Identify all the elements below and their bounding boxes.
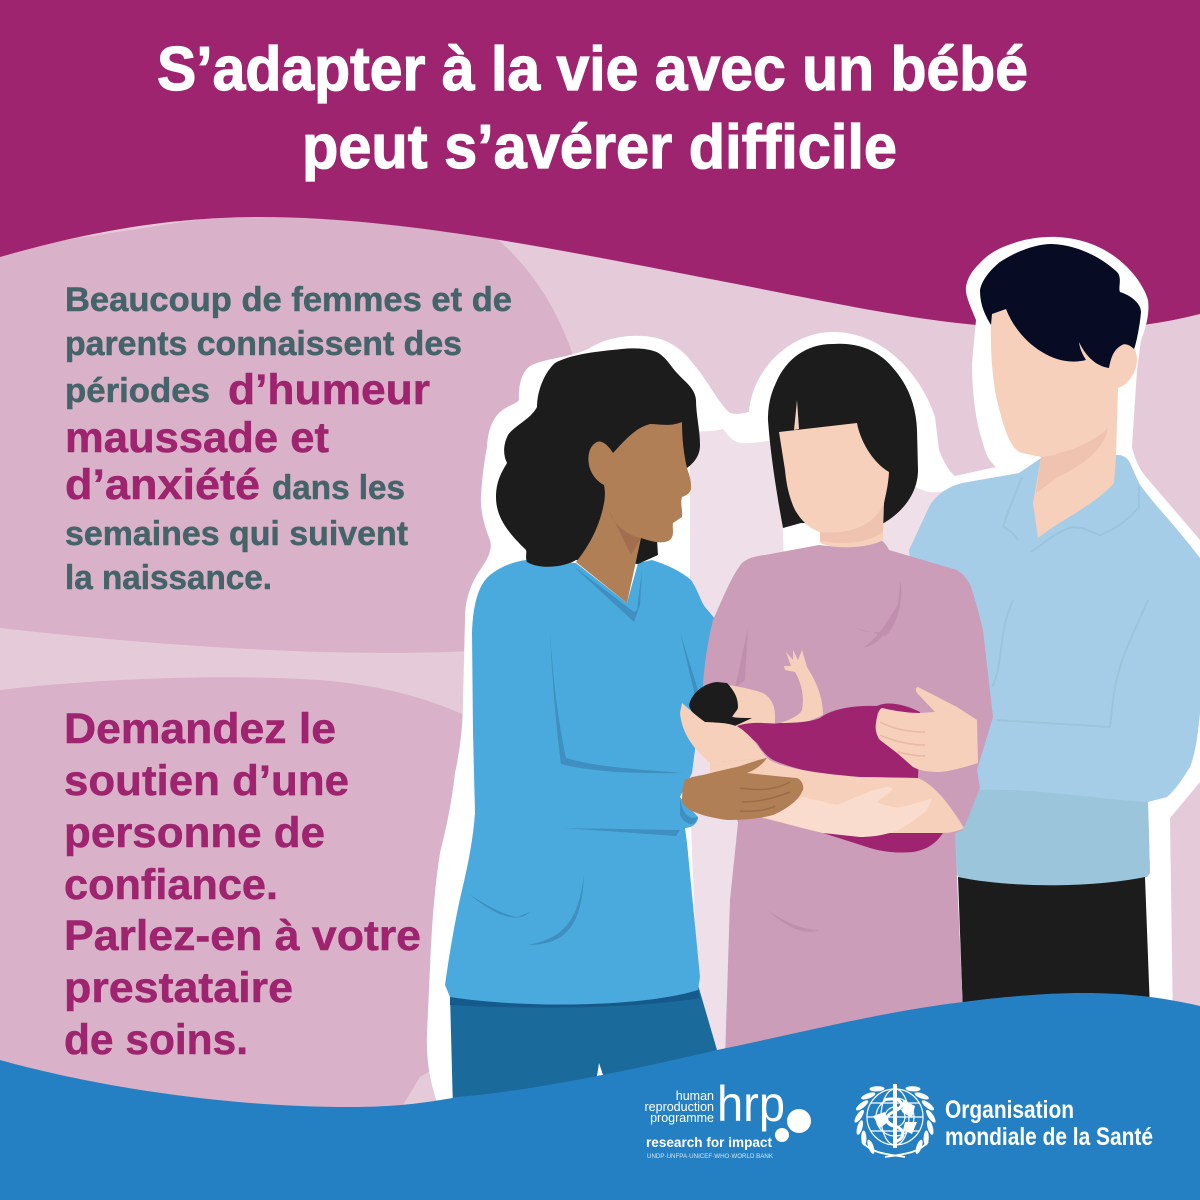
man shirt creases (992, 477, 1148, 727)
staff and serpent (893, 1084, 897, 1148)
text block: mood and anxiety: d’humeur (228, 366, 430, 414)
hand under head (680, 703, 767, 763)
hair back (768, 344, 918, 528)
laurel left (853, 1086, 905, 1157)
man shirt lower (955, 790, 1150, 885)
blue woman pants (450, 985, 730, 1110)
text block: ask for support: confiance. (64, 861, 278, 909)
figure: woman holding baby (680, 344, 993, 1060)
globe (867, 1089, 923, 1145)
text block: ask for support: personne de (64, 809, 325, 857)
text block: mood and anxiety: périodes (65, 372, 210, 410)
baby hair (689, 682, 752, 730)
blue woman face and neck (576, 422, 691, 603)
text block: ask for support: prestataire (64, 964, 293, 1012)
text block: mood and anxiety (65, 281, 512, 597)
blue top creases (469, 565, 698, 945)
text block: mood and anxiety: dans les (272, 469, 405, 507)
text block: mood and anxiety: la naissance. (65, 559, 272, 597)
man hair (980, 244, 1141, 368)
logo: HRP (644, 1076, 811, 1160)
logo: HRP: hrp (717, 1076, 785, 1132)
logo: HRP: programme (650, 1111, 714, 1125)
white figure outline (427, 237, 1200, 1110)
panel: upper text background (0, 210, 600, 655)
light background between figures (690, 429, 965, 1060)
pink top creases (735, 580, 901, 932)
baby head (730, 685, 775, 730)
panel: lower text background (0, 677, 475, 1110)
text block: mood and anxiety: semaines qui suivent (65, 515, 408, 553)
figure: man (909, 244, 1200, 1015)
blue woman neck shadow (609, 510, 641, 555)
man hand (876, 687, 978, 772)
forearm under baby (710, 758, 964, 833)
text block: ask for support: soutien d’une (64, 757, 349, 805)
neck shadow (820, 503, 884, 543)
text block: ask for support (64, 705, 421, 1064)
logo: HRP: UNDP·UNFPA·UNICEF·WHO·WORLD BANK (647, 1154, 773, 1160)
text block: mood and anxiety: parents connaissent des (65, 325, 462, 363)
logo: WHO name: mondiale de la Santé (945, 1123, 1153, 1151)
footer band (0, 993, 1200, 1200)
text block: mood and anxiety: d’anxiété (65, 461, 260, 509)
pink top (703, 540, 993, 1060)
header band (0, 0, 1200, 330)
second forearm (763, 787, 932, 837)
laurel right (885, 1086, 937, 1157)
title: peut s’avérer difficile (302, 113, 897, 182)
blue woman hand (682, 758, 803, 820)
man shirt (909, 455, 1200, 885)
text block: mood and anxiety: Beaucoup de femmes et de (65, 281, 512, 319)
blue woman top (445, 560, 716, 1005)
text block: ask for support: Demandez le (64, 705, 336, 753)
logo: HRP: human (676, 1089, 714, 1103)
continents (873, 1100, 917, 1134)
face and neck (779, 423, 889, 547)
baby lower wrap (823, 833, 943, 852)
man pants (958, 877, 1150, 1015)
logo: WHO name (945, 1096, 1153, 1151)
baby dress (737, 704, 920, 778)
figure: woman with blue top (445, 348, 730, 1110)
logo: WHO emblem (853, 1084, 937, 1157)
title (157, 35, 1028, 182)
blue woman pants shadow (450, 990, 700, 1008)
title: S’adapter à la vie avec un bébé (157, 35, 1028, 104)
logo: WHO name: Organisation (945, 1096, 1074, 1124)
blue woman hair (496, 348, 700, 567)
logo: HRP: reproduction (644, 1100, 714, 1114)
text block: ask for support: Parlez-en à votre (64, 912, 421, 960)
fringe slit (794, 400, 799, 430)
baby arm (780, 650, 823, 725)
man neck shadow (1036, 428, 1108, 493)
notch between trousers (597, 1063, 603, 1076)
logo: HRP: research for impact (646, 1135, 772, 1150)
text block: mood and anxiety: maussade et (65, 414, 329, 462)
text block: ask for support: de soins. (64, 1016, 248, 1064)
man face and neck (991, 305, 1137, 538)
